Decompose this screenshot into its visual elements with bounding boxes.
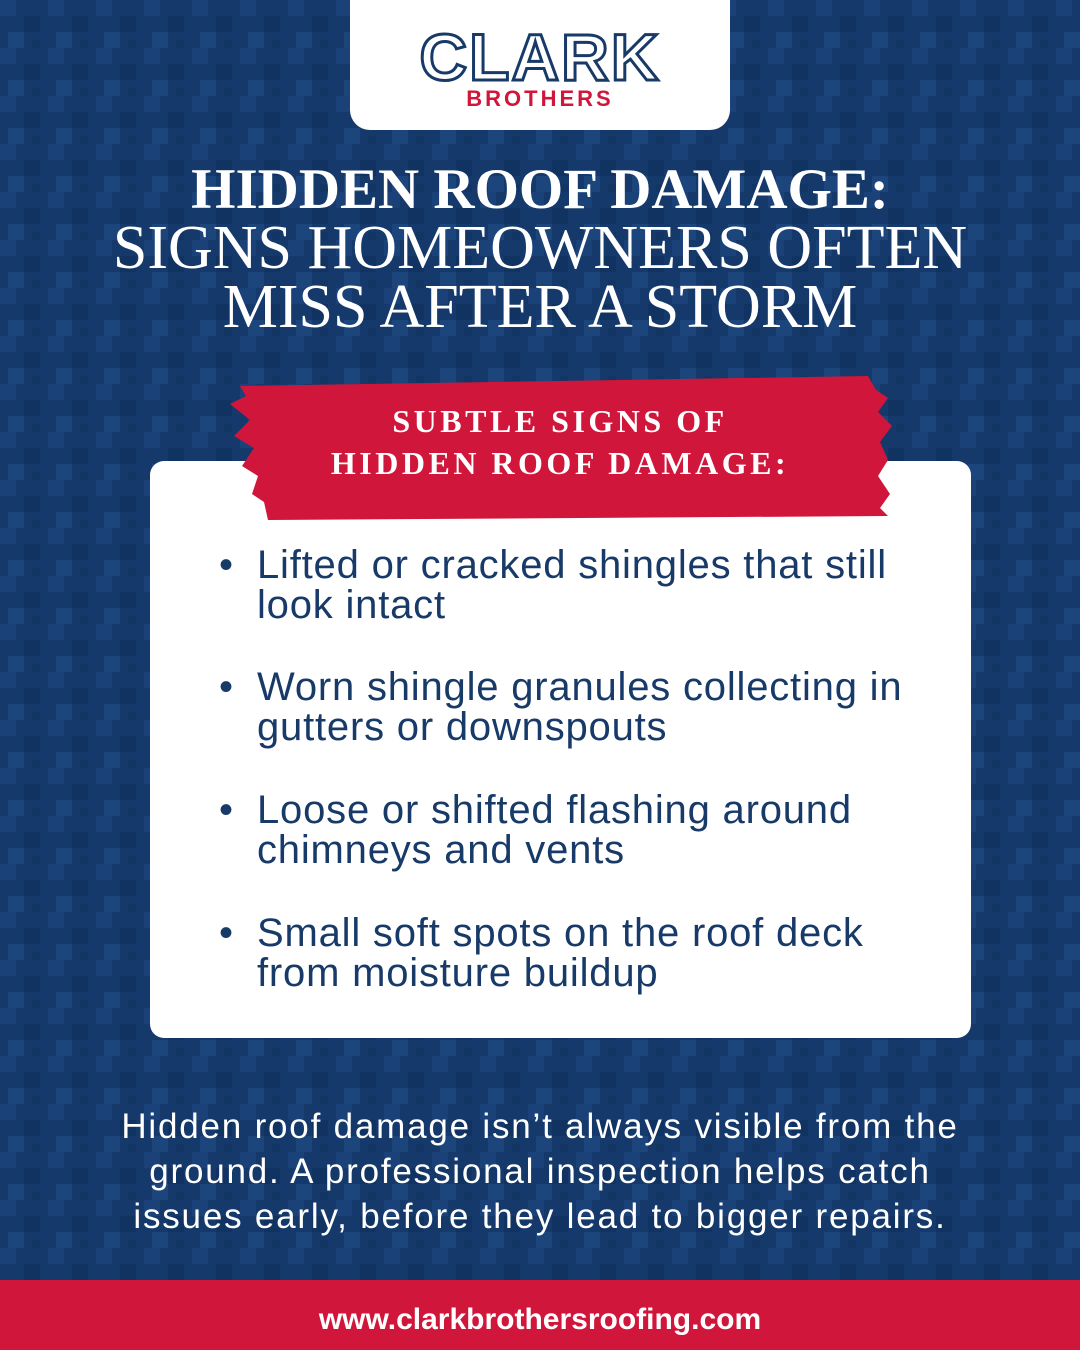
- bullet list: Worn shingle granules collecting in: [257, 665, 902, 709]
- bullet list: Loose or shifted flashing around: [257, 788, 852, 832]
- bullet list: look intact: [257, 583, 446, 627]
- white card: •: [219, 788, 234, 832]
- white card: [150, 461, 971, 1038]
- white card: •: [219, 665, 234, 709]
- white card: •: [219, 543, 234, 587]
- title: MISS AFTER A STORM: [223, 273, 857, 341]
- title: SIGNS HOMEOWNERS OFTEN: [113, 214, 967, 282]
- banner text: HIDDEN ROOF DAMAGE:: [331, 445, 789, 481]
- closing text: ground. A professional inspection helps catch: [149, 1152, 931, 1191]
- bullet list: gutters or downspouts: [257, 705, 667, 749]
- banner text: [331, 403, 789, 481]
- footer bar: [0, 1280, 1080, 1350]
- logo box: [350, 0, 730, 130]
- title: HIDDEN ROOF DAMAGE:: [191, 158, 889, 221]
- logo: BROTHERS: BROTHERS: [466, 86, 614, 111]
- banner text: SUBTLE SIGNS OF: [392, 403, 728, 439]
- closing text: issues early, before they lead to bigger repairs.: [133, 1197, 947, 1236]
- bullet list: from moisture buildup: [257, 951, 658, 995]
- bullet list: chimneys and vents: [257, 828, 625, 872]
- bullet list: [219, 543, 902, 995]
- bullet list: Small soft spots on the roof deck: [257, 911, 864, 955]
- white card: •: [219, 911, 234, 955]
- banner: [230, 376, 892, 520]
- bullet list: Lifted or cracked shingles that still: [257, 543, 887, 587]
- footer bar: www.clarkbrothersroofing.com: [319, 1303, 761, 1336]
- title: [113, 158, 967, 341]
- logo: CLARK: CLARK: [420, 20, 660, 94]
- closing text: [121, 1107, 959, 1236]
- closing text: Hidden roof damage isn’t always visible from the: [121, 1107, 959, 1146]
